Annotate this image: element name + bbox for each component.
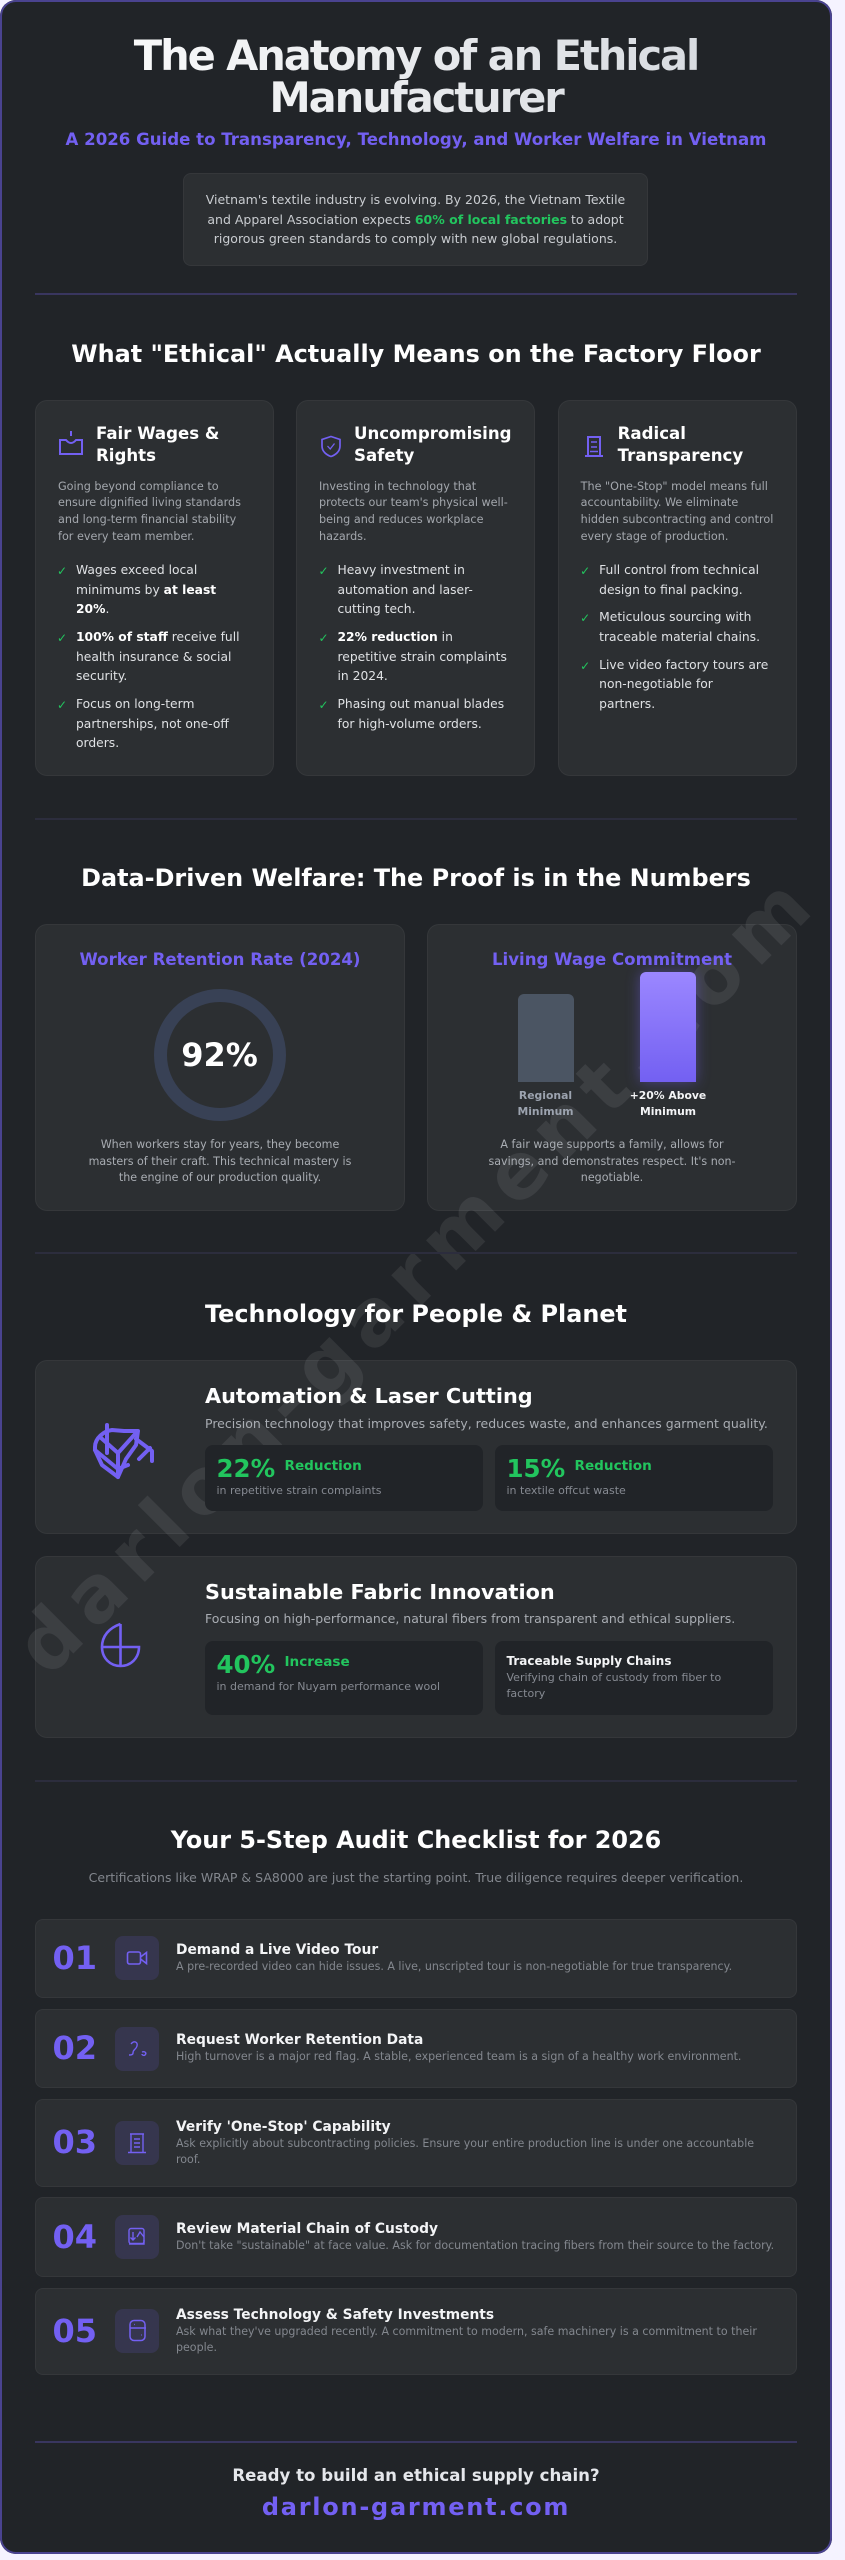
icon: wages xyxy=(59,431,83,455)
step 5 xyxy=(35,2288,797,2375)
bullet: insurance xyxy=(57,630,240,683)
step description xyxy=(176,2325,757,2354)
bullet: partnerships: partnerships, not one-off xyxy=(76,716,229,730)
bullet: automation: cutting tech. xyxy=(338,602,415,616)
bullet: blades: for high-volume orders. xyxy=(338,716,482,730)
step description: roof. xyxy=(176,2153,200,2166)
chart description: the engine of our production quality. xyxy=(119,1171,321,1184)
donut chart xyxy=(154,989,286,1121)
intro text: rigorous green standards to comply with new global regulations. xyxy=(214,231,617,246)
panel: safety: ✓ xyxy=(318,631,329,645)
bullet: automation: Heavy investment in xyxy=(338,563,465,577)
chart description xyxy=(89,1138,351,1184)
card description: every stage of production. xyxy=(581,530,728,543)
step title: Verify 'One-Stop' Capability xyxy=(176,2119,391,2135)
bar label: above xyxy=(630,1088,706,1118)
tech description: Precision technology that improves safety, reduces waste, and enhances garment quality. xyxy=(205,1416,768,1431)
bar label: regional xyxy=(517,1088,574,1118)
panel: fair wages: ✓ xyxy=(57,698,67,712)
stat label: Reduction xyxy=(284,1458,362,1474)
footer website: darlon-garment.com xyxy=(262,2493,570,2521)
stat description: Verifying chain of custody from fiber to xyxy=(506,1671,721,1684)
card description xyxy=(58,480,241,543)
stat value: 40% xyxy=(216,1650,275,1679)
step description: Ask what they've upgraded recently. A commitment to modern, safe machinery is a commitment to their xyxy=(176,2325,757,2338)
bullet: automation: automation and laser- xyxy=(338,582,473,596)
panel: transparency: ✓ xyxy=(580,564,590,578)
bullet: blades xyxy=(318,697,504,730)
watermark: darlon-garment.com xyxy=(0,854,832,1692)
panel: fair wages: ✓ xyxy=(57,564,67,578)
card description: being and reduces workplace xyxy=(319,513,483,526)
bullet: wages: Wages exceed local xyxy=(76,563,197,577)
bar label: regional: Minimum xyxy=(517,1105,574,1118)
icon: material xyxy=(115,2215,159,2259)
card title: Transparency xyxy=(618,446,743,465)
bullet: sourcing xyxy=(580,610,760,644)
bullet: control: design to final packing. xyxy=(599,582,743,596)
step number: 04 xyxy=(52,2218,97,2256)
card description: ensure dignified living standards xyxy=(58,496,241,509)
panel: automation xyxy=(35,1360,797,1534)
card description: for every team member. xyxy=(58,530,194,543)
stat description: in textile offcut waste xyxy=(506,1484,626,1497)
card title xyxy=(618,424,743,465)
card description xyxy=(319,480,508,543)
card title xyxy=(96,424,219,465)
step 2 xyxy=(35,2009,797,2088)
stat description: factory xyxy=(506,1687,545,1700)
stat label: Increase xyxy=(284,1654,350,1670)
stat value: 22% xyxy=(216,1454,275,1483)
card description: hidden subcontracting and control xyxy=(581,513,773,526)
step 1 xyxy=(35,1919,797,1998)
step description: Ask explicitly about subcontracting policies. Ensure your entire production line is under one accountable xyxy=(176,2137,754,2150)
step description: people. xyxy=(176,2341,217,2354)
step number: 05 xyxy=(52,2312,97,2350)
icon: retention xyxy=(115,2027,159,2071)
chart title: Living Wage Commitment xyxy=(492,950,732,969)
stat value: 15% xyxy=(506,1454,565,1483)
heading: audit checklist: Your 5-Step Audit Checklist for 2026 xyxy=(171,1826,661,1854)
tech description: Focusing on high-performance, natural fibers from transparent and ethical suppliers. xyxy=(205,1611,735,1626)
card title xyxy=(354,424,512,465)
card description: Going beyond compliance to xyxy=(58,480,219,492)
panel: transparency: ✓ xyxy=(580,611,590,625)
bullet: sourcing: Meticulous sourcing with xyxy=(599,610,751,624)
icon: fabric xyxy=(100,1622,140,1668)
step title: Request Worker Retention Data xyxy=(176,2032,423,2048)
step description: A pre-recorded video can hide issues. A live, unscripted tour is non-negotiable for true transparency. xyxy=(176,1960,732,1973)
icon: automation xyxy=(92,1423,154,1480)
panel: safety: ✓ xyxy=(318,698,329,712)
panel: sustainable fabric xyxy=(35,1556,797,1738)
heading: data-driven welfare: Data-Driven Welfare: The Proof is in the Numbers xyxy=(81,864,751,892)
stat: offcut waste xyxy=(495,1445,773,1511)
heading: technology: Technology for People & Planet xyxy=(205,1300,627,1328)
bar: regional minimum xyxy=(518,994,574,1082)
card description: and long-term financial stability xyxy=(58,513,236,526)
icon: document xyxy=(115,2121,159,2165)
checklist intro: Certifications like WRAP & SA8000 are just the starting point. True diligence requires deeper verification. xyxy=(89,1870,743,1885)
panel: worker retention chart xyxy=(35,924,405,1211)
bullet: partnerships xyxy=(57,697,230,750)
icon: shield xyxy=(321,436,341,458)
bullet: reduction: 22% reduction in xyxy=(338,630,453,644)
panel: fair wages: ✓ xyxy=(57,631,67,645)
card description xyxy=(580,480,773,543)
chart title: Worker Retention Rate (2024) xyxy=(79,950,361,969)
card title: Rights xyxy=(96,446,156,465)
card title: Fair Wages & xyxy=(96,424,219,443)
subtitle: A 2026 Guide to Transparency, Technology, and Worker Welfare in Vietnam xyxy=(66,130,766,149)
intro text: and Apparel Association expects 60% of local factories to adopt xyxy=(207,212,624,226)
bullet: tours: partners. xyxy=(599,696,655,710)
step number: 01 xyxy=(52,1939,97,1977)
step description xyxy=(176,2137,754,2166)
bullet: blades: Phasing out manual blades xyxy=(338,697,504,711)
card description: accountability. We eliminate xyxy=(581,496,738,509)
bullet: partnerships: orders. xyxy=(76,736,119,750)
step title: Review Material Chain of Custody xyxy=(176,2221,438,2237)
intro text: Vietnam's textile industry is evolving. By 2026, the Vietnam Textile xyxy=(206,192,625,207)
card title: Safety xyxy=(354,446,414,465)
card description: Investing in technology that xyxy=(319,480,476,492)
bullet: tours: non-negotiable for xyxy=(599,677,713,691)
bullet: automation xyxy=(318,563,473,616)
heading: what ethical means: What "Ethical" Actually Means on the Factory Floor xyxy=(71,340,761,368)
bullet: reduction: in 2024. xyxy=(338,669,388,683)
card description: protects our team's physical well- xyxy=(319,496,508,509)
chart description xyxy=(488,1138,736,1184)
chart description: savings, and demonstrates respect. It's non- xyxy=(488,1155,736,1168)
chart description: negotiable. xyxy=(581,1171,643,1184)
bullet: wages: 20%. xyxy=(76,602,109,616)
step title: Demand a Live Video Tour xyxy=(176,1942,378,1958)
bullet: insurance: health insurance & social xyxy=(76,650,231,664)
step number: 02 xyxy=(52,2029,97,2067)
bar label: above: +20% Above xyxy=(630,1088,706,1102)
title: Manufacturer xyxy=(269,72,563,122)
stat description: in demand for Nuyarn performance wool xyxy=(216,1680,440,1693)
bullet: control: Full control from technical xyxy=(599,563,759,577)
bullet: tours xyxy=(580,658,768,710)
bar label: regional: Regional xyxy=(519,1088,572,1102)
stat: strain complaints xyxy=(205,1445,483,1511)
bullet: reduction xyxy=(318,630,507,683)
stat description: in repetitive strain complaints xyxy=(216,1484,382,1497)
step title: Assess Technology & Safety Investments xyxy=(176,2307,494,2323)
card description: The "One-Stop" model means full xyxy=(581,480,768,492)
tech title: Sustainable Fabric Innovation xyxy=(205,1580,555,1604)
title: The Anatomy of an Ethical xyxy=(134,30,698,80)
footer call to action: Ready to build an ethical supply chain? xyxy=(232,2466,600,2485)
icon: machinery xyxy=(115,2309,159,2353)
step description: High turnover is a major red flag. A stable, experienced team is a sign of a healthy work environment. xyxy=(176,2050,741,2063)
panel: transparency: ✓ xyxy=(580,658,590,672)
bullet: wages xyxy=(57,563,216,616)
icon: video xyxy=(115,1936,159,1980)
step description: Don't take "sustainable" at face value. Ask for documentation tracing fibers from their source to the factory. xyxy=(176,2239,774,2252)
bullet: reduction: repetitive strain complaints xyxy=(338,650,507,664)
bar: above minimum xyxy=(640,972,696,1082)
tech title: Automation & Laser Cutting xyxy=(205,1384,533,1408)
bullet: partnerships: Focus on long-term xyxy=(76,697,194,711)
stat description xyxy=(506,1671,721,1700)
bar label: above: Minimum xyxy=(640,1105,696,1118)
step 3 xyxy=(35,2099,797,2187)
panel: safety xyxy=(296,400,535,776)
chart description: A fair wage supports a family, allows for xyxy=(500,1138,724,1151)
bullet: insurance: security. xyxy=(76,669,127,683)
bullet: sourcing: traceable material chains. xyxy=(599,630,760,644)
panel: safety: ✓ xyxy=(318,564,329,578)
card title: Uncompromising xyxy=(354,424,512,443)
card description: hazards. xyxy=(319,530,367,543)
chart description: When workers stay for years, they become xyxy=(101,1138,339,1151)
intro callout xyxy=(183,173,648,266)
chart description: masters of their craft. This technical mastery is xyxy=(89,1155,351,1168)
bullet: insurance: 100% of staff receive full xyxy=(76,630,240,644)
panel: transparency xyxy=(558,400,797,776)
step 4 xyxy=(35,2197,797,2277)
stat label: Reduction xyxy=(574,1458,652,1474)
panel: living wage chart xyxy=(427,924,797,1211)
bullet: tours: Live video factory tours are xyxy=(599,658,768,672)
stat: supply chains xyxy=(495,1641,773,1715)
bullet: wages: minimums by at least xyxy=(76,582,216,596)
step number: 03 xyxy=(52,2123,97,2161)
bullet: control xyxy=(580,563,759,596)
stat: demand xyxy=(205,1641,483,1715)
stat title: Traceable Supply Chains xyxy=(506,1654,671,1668)
donut value: 92% xyxy=(181,1036,258,1074)
card title: Radical xyxy=(618,424,686,443)
title xyxy=(0,34,832,118)
icon: building xyxy=(585,436,603,457)
intro text xyxy=(206,192,625,246)
panel: fair wages xyxy=(35,400,274,776)
